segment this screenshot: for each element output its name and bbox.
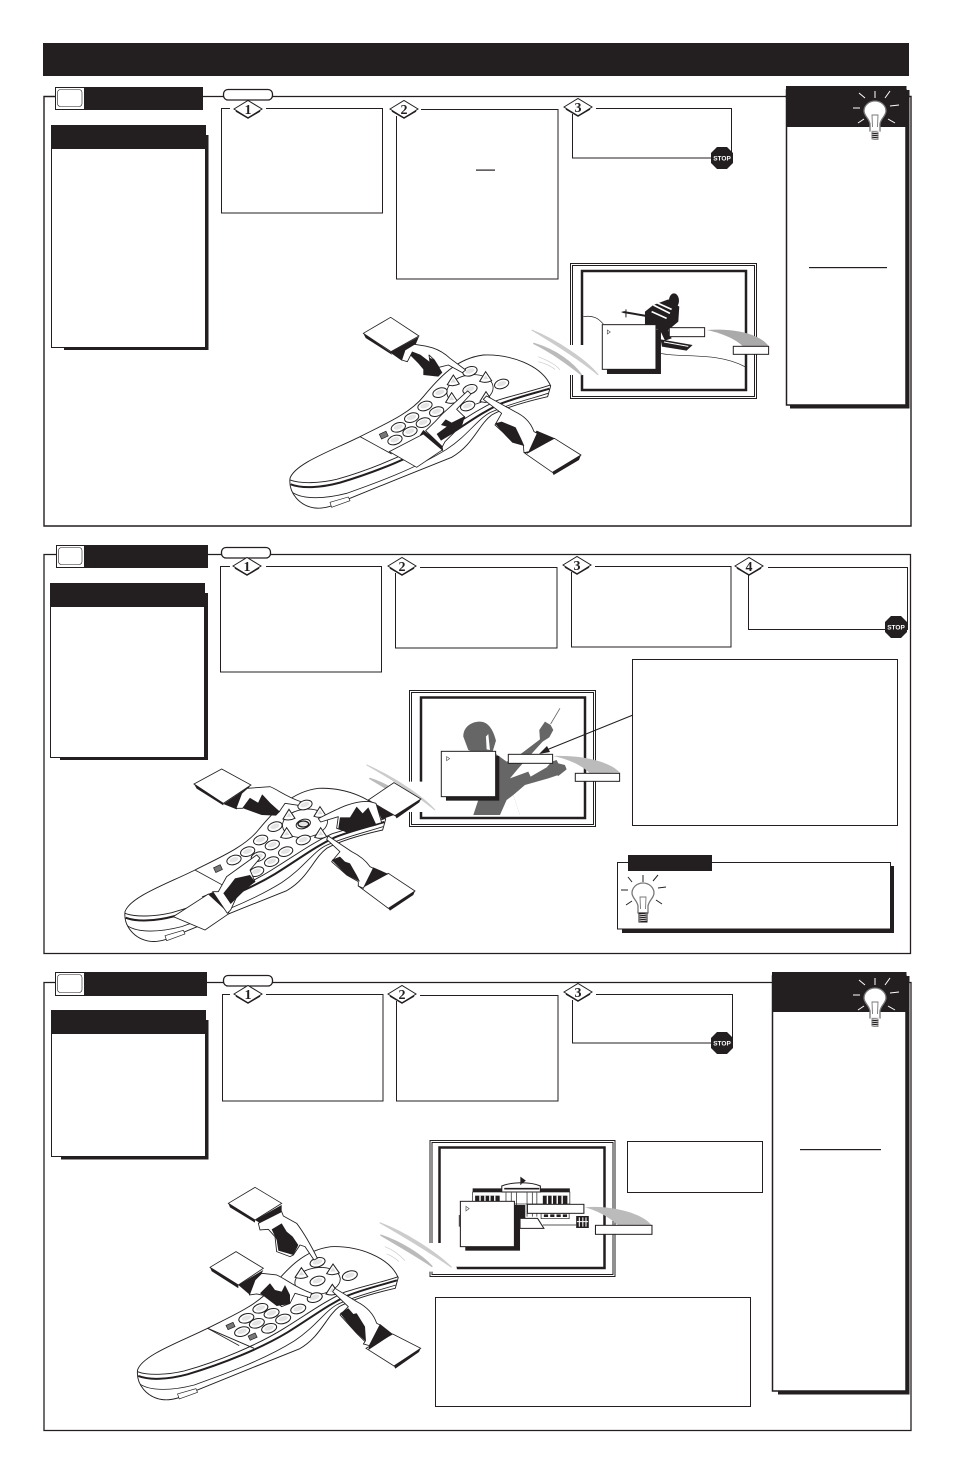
step 4 box bbox=[735, 558, 908, 638]
section 1 side panel bbox=[51, 125, 208, 350]
hand: upper right bbox=[318, 783, 421, 833]
on-screen menu bbox=[460, 1201, 520, 1251]
icon: light bulb bbox=[621, 875, 666, 922]
step 2 box bbox=[385, 986, 558, 1101]
hand: lower left bbox=[173, 855, 260, 930]
step 2 box: 2 bbox=[398, 988, 406, 1003]
callout label bbox=[575, 773, 620, 781]
hand: upper left bbox=[194, 769, 301, 816]
section 1 panel bbox=[44, 86, 911, 526]
on-screen menu bbox=[602, 325, 661, 374]
section 3 side panel bbox=[51, 1010, 208, 1160]
section 3 tip panel bbox=[772, 972, 910, 1394]
on-screen label bbox=[508, 754, 553, 763]
step 1 box bbox=[222, 100, 382, 213]
side note box bbox=[628, 1142, 762, 1192]
section 2 side panel bbox=[50, 583, 208, 760]
section 2 pill bbox=[222, 548, 270, 558]
on-screen label bbox=[669, 328, 705, 337]
note box bbox=[436, 1298, 750, 1406]
callout label bbox=[595, 1225, 652, 1234]
tip box bbox=[618, 855, 894, 933]
step 1 box: 1 bbox=[244, 103, 252, 118]
hand: upper left bbox=[363, 317, 466, 377]
icon: light bulb bbox=[853, 978, 899, 1027]
tv screen 2 bbox=[410, 690, 620, 826]
section 2 panel bbox=[44, 545, 910, 954]
on-screen menu bbox=[441, 751, 499, 801]
icon: stop sign bbox=[885, 616, 907, 638]
illustration: white house building bbox=[460, 1177, 589, 1228]
section 1 tv screen bbox=[570, 264, 769, 398]
step 3 box: 3 bbox=[574, 986, 582, 1001]
section 1 top rule bbox=[203, 96, 785, 98]
illustration: skier bbox=[622, 293, 693, 351]
hand: lower middle bbox=[389, 391, 471, 467]
remote control 2 bbox=[125, 765, 435, 942]
icon: stop sign bbox=[711, 147, 733, 169]
note box bbox=[632, 660, 898, 826]
illustration: conductor bbox=[463, 708, 567, 815]
step 2 box bbox=[386, 100, 558, 279]
step 2 box: 2 bbox=[400, 103, 408, 118]
tv screen 3 bbox=[430, 1140, 652, 1276]
hand: lower right bbox=[483, 396, 581, 475]
icon: light bulb bbox=[853, 91, 899, 140]
step 1 box bbox=[222, 986, 383, 1101]
signal waves bbox=[367, 765, 435, 812]
swoosh bbox=[707, 330, 769, 347]
hand: lower right bbox=[333, 1288, 421, 1369]
step 2 box: 2 bbox=[398, 560, 406, 575]
step 3 box bbox=[562, 98, 733, 169]
hand: left bbox=[210, 1252, 312, 1307]
step 1 box: 1 bbox=[244, 988, 252, 1003]
on-screen label bbox=[527, 1204, 584, 1213]
section 3 heading bar bbox=[55, 972, 207, 996]
step 3 box: 3 bbox=[574, 559, 580, 574]
remote control 3 bbox=[137, 1187, 457, 1400]
arrow: note to screen bbox=[539, 715, 633, 754]
swoosh bbox=[585, 1207, 652, 1225]
title bar bbox=[43, 43, 909, 76]
section 1 tip panel bbox=[786, 86, 910, 408]
swoosh bbox=[553, 756, 620, 773]
section 3 frame bbox=[44, 982, 911, 1430]
icon: stop sign bbox=[711, 1032, 733, 1054]
step 3 box bbox=[560, 556, 731, 647]
section 1 pill bbox=[224, 90, 272, 100]
step 3 box bbox=[562, 984, 733, 1054]
section 3 pill bbox=[224, 976, 272, 986]
signal waves bbox=[532, 330, 600, 375]
step 3 box: 3 bbox=[574, 101, 582, 116]
section 2 frame bbox=[44, 554, 910, 954]
signal waves bbox=[380, 1223, 457, 1272]
step 2 box bbox=[385, 558, 557, 648]
step 1 box bbox=[220, 558, 382, 672]
step 1 box: 1 bbox=[244, 560, 250, 575]
tip heading bar bbox=[628, 855, 712, 871]
section 3 top rule bbox=[207, 982, 772, 984]
section 1 heading bar bbox=[55, 87, 203, 110]
section 3 panel bbox=[44, 972, 911, 1430]
step 4 box: 4 bbox=[746, 560, 752, 575]
callout label bbox=[733, 346, 769, 354]
remote control 1 bbox=[290, 317, 600, 508]
hand: lower right bbox=[327, 836, 415, 911]
section 2 heading bar bbox=[56, 545, 208, 568]
section 1 frame bbox=[44, 96, 911, 526]
hand: top bbox=[228, 1187, 317, 1260]
